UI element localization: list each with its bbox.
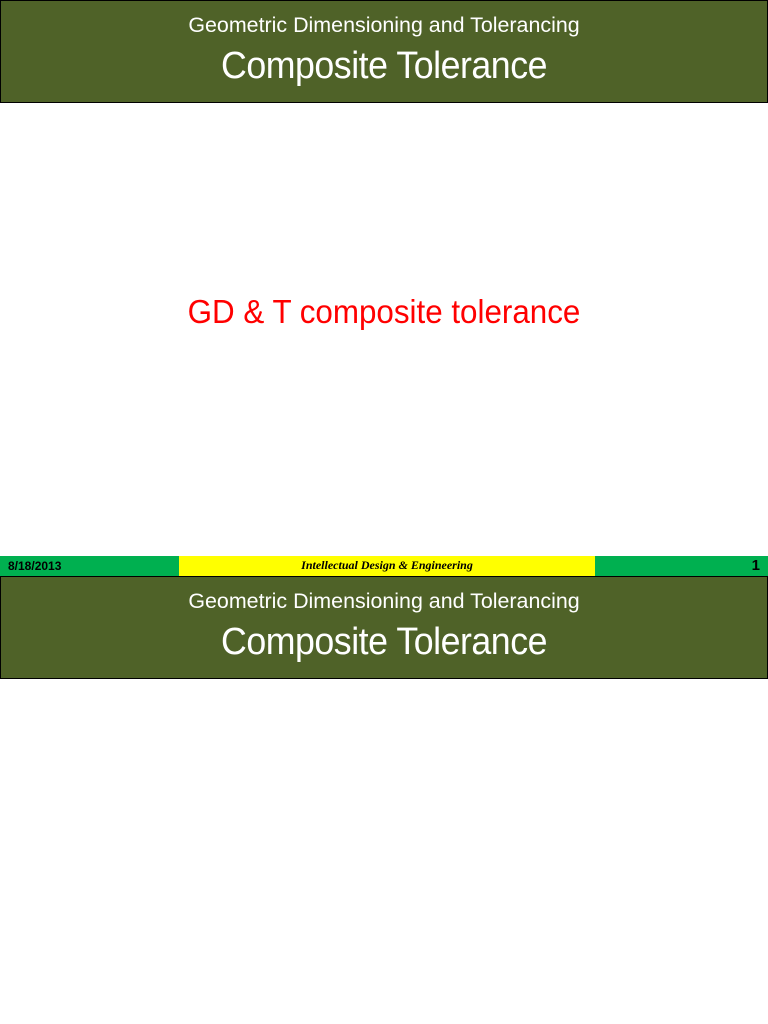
company name [179, 556, 595, 576]
red heading: GD & T composite tolerance [188, 293, 580, 330]
company name: Intellectual Design & Engineering [301, 558, 473, 572]
date: 8/18/2013 [8, 559, 61, 573]
footer bar [0, 556, 768, 576]
subtitle 2: Geometric Dimensioning and Tolerancing [188, 590, 580, 613]
header: slide 2 [0, 576, 768, 679]
title 2: Composite Tolerance [221, 621, 547, 663]
page number: 1 [752, 557, 760, 574]
subtitle: Geometric Dimensioning and Tolerancing [188, 14, 580, 37]
header: slide 1 [0, 0, 768, 103]
title: Composite Tolerance [221, 45, 547, 87]
